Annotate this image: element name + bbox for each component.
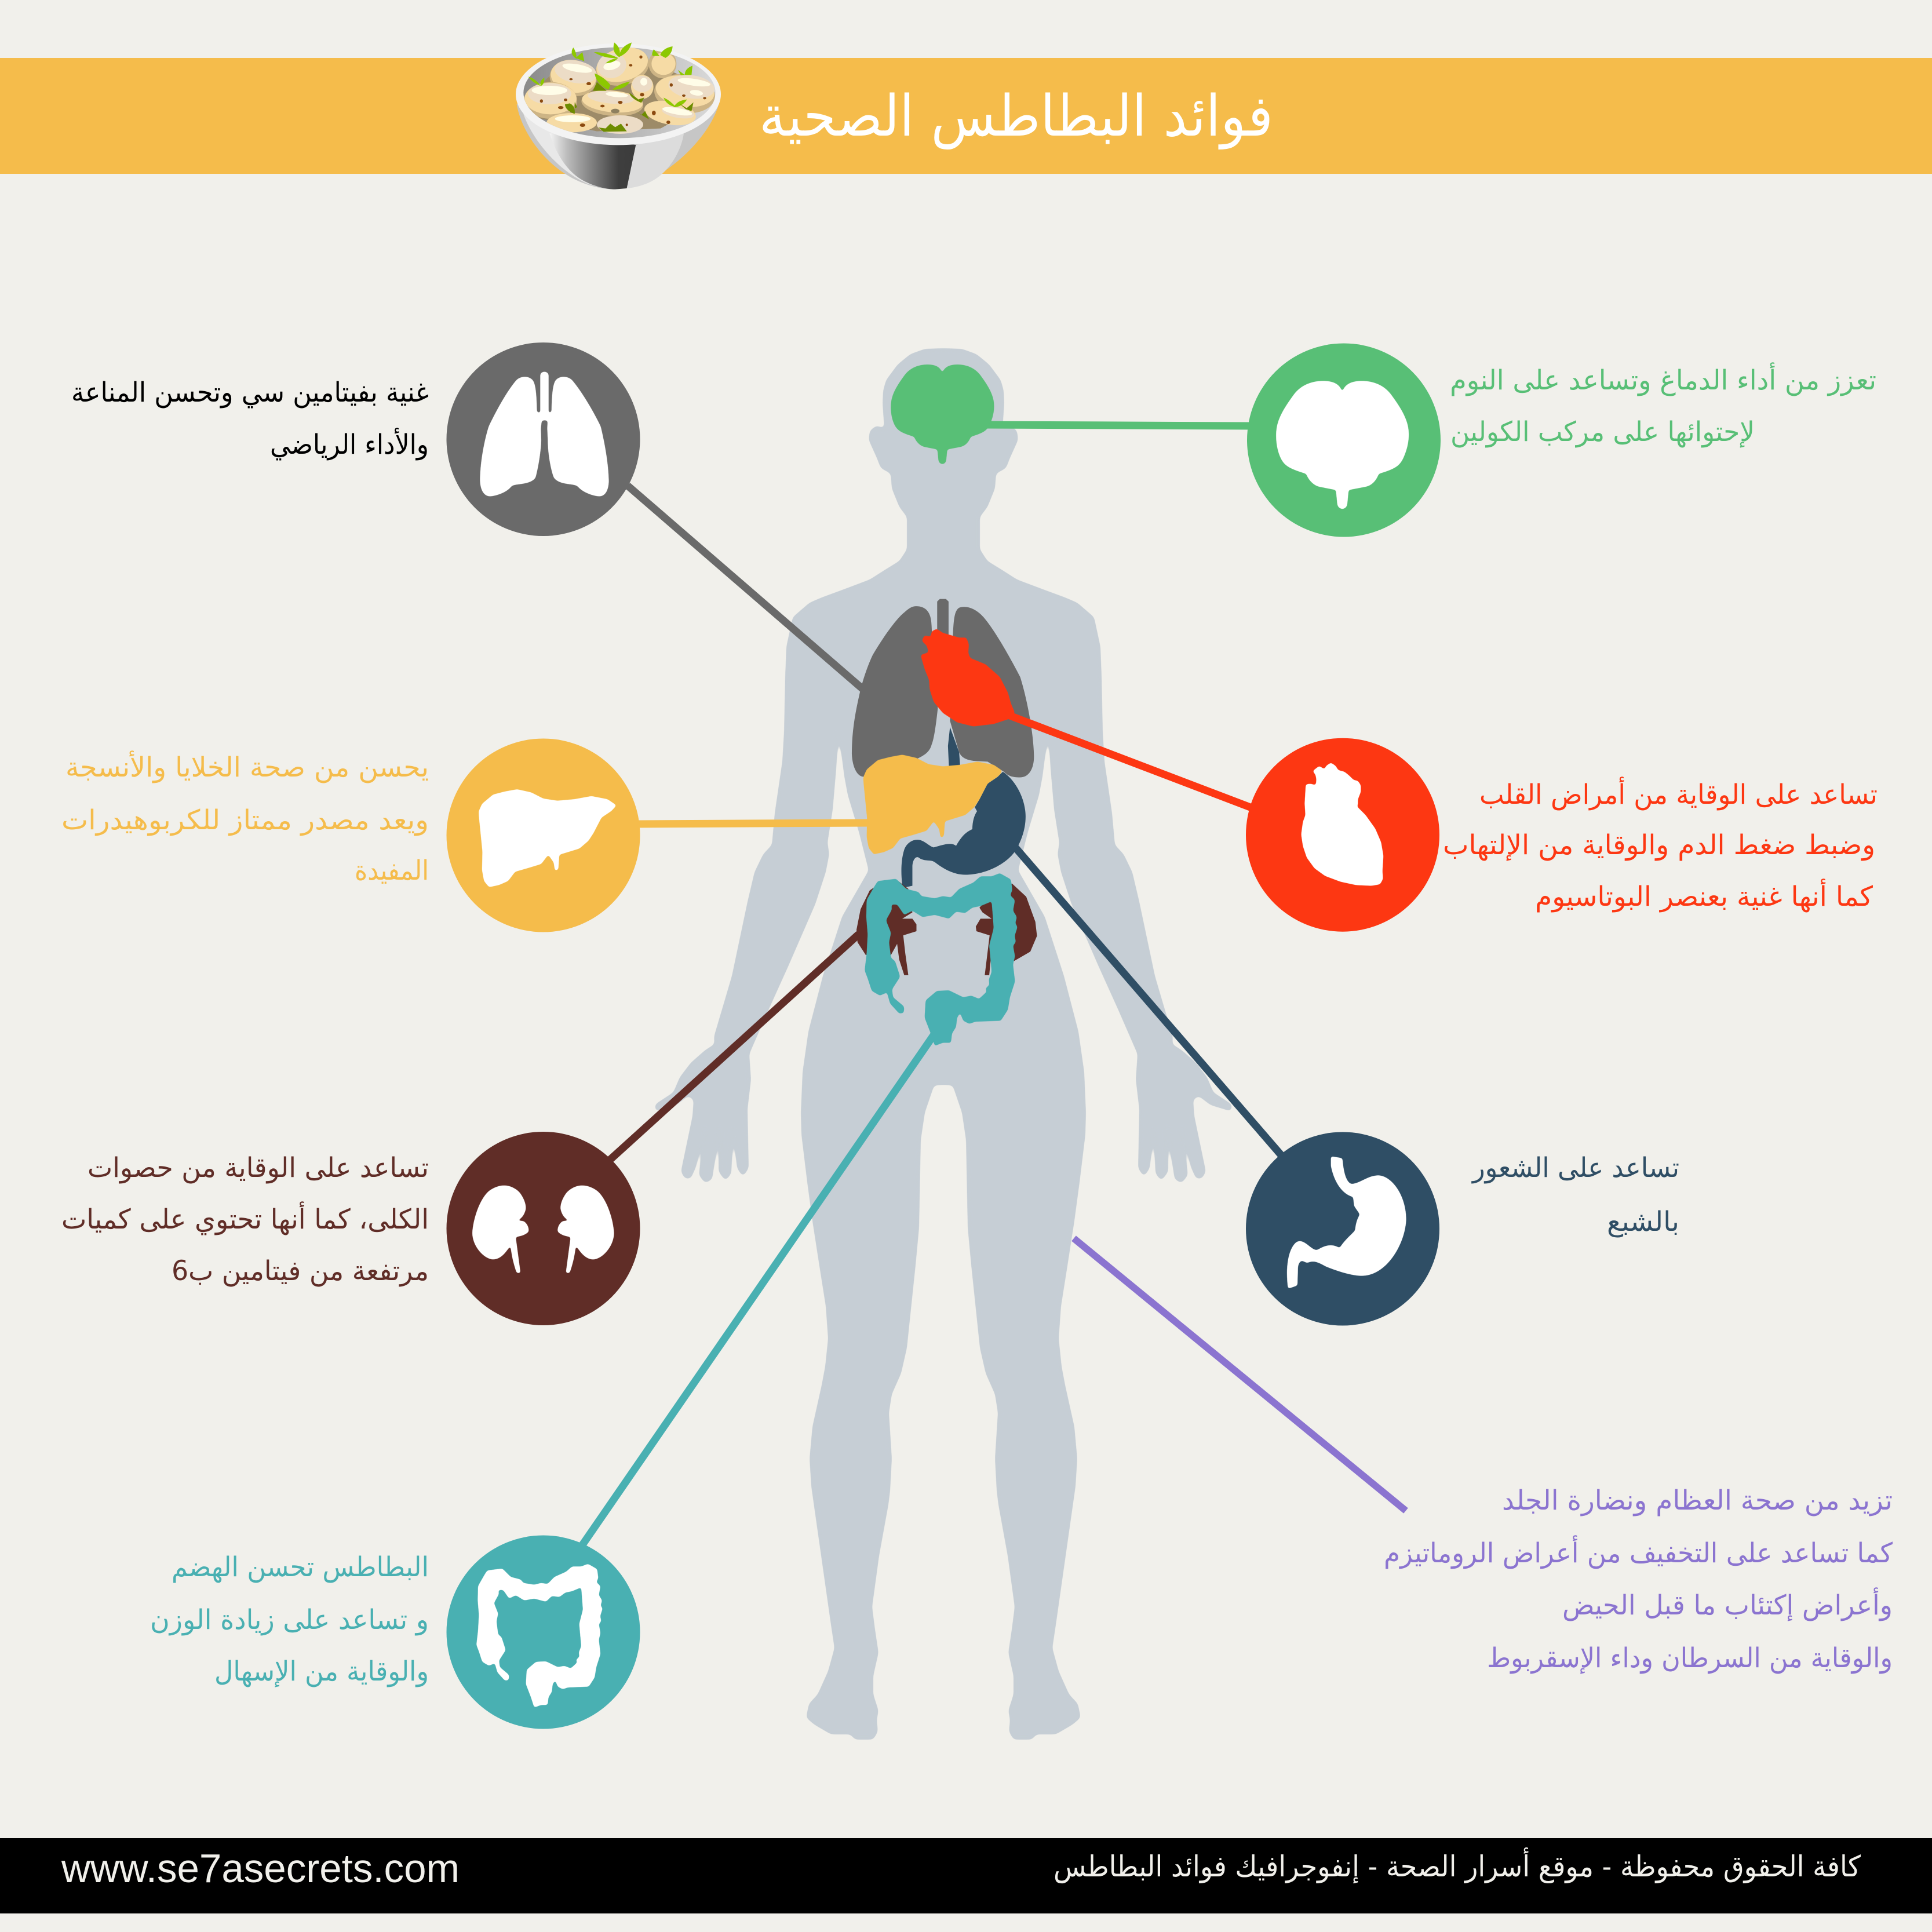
footer bar [0,1838,1932,1913]
footer copyright: كافة الحقوق محفوظة - موقع أسرار الصحة - إنفوجرافيك فوائد البطاطس [1054,1847,1861,1884]
icon: stomach [1287,1156,1406,1289]
text: lungs benefit: غنية بفيتامين سي وتحسن المناعة [71,377,429,409]
footer website: www.se7asecrets.com [61,1846,460,1891]
text: lungs benefit [71,377,429,461]
panel: colon [150,1536,640,1729]
text: skin and bones benefit: كما تساعد على التخفيف من أعراض الروماتيزم [1384,1535,1893,1569]
text: liver benefit: ويعد مصدر ممتاز للكربوهيدرات [61,804,429,836]
circle: kidneys [446,1132,640,1325]
panel: brain [1247,343,1876,537]
panel: heart [1246,738,1878,932]
organ: esophagus [948,727,960,768]
header banner [0,58,1932,174]
panel: kidneys [61,1132,640,1325]
circle: lungs [446,342,640,536]
text: brain benefit: تعزز من أداء الدماغ وتساعد على النوم [1450,362,1876,396]
icon: bowl of potatoes [516,42,721,189]
connector: colon teal [582,1034,934,1545]
connector: liver yellow [637,823,872,824]
text: colon benefit [150,1551,429,1687]
organ: liver [863,754,1003,854]
organs in torso [852,599,1037,1046]
panel: liver [61,738,640,932]
text: skin and bones benefit: وأعراض إكتئاب ما قبل الحيض [1562,1587,1893,1621]
text: kidneys benefit [61,1152,429,1287]
organ: lungs [852,599,1034,777]
text: kidneys benefit: مرتفعة من فيتامين ب6 [172,1255,429,1287]
panel: lungs [71,342,640,536]
text: colon benefit: البطاطس تحسن الهضم [172,1551,429,1583]
text: lungs benefit: والأداء الرياضي [270,427,429,461]
organ: stomach [901,772,1026,888]
text: stomach benefit [1471,1152,1679,1238]
title: فوائد البطاطس الصحية [759,83,1273,150]
organ: brain [891,364,994,464]
connector: skin purple [1074,1238,1406,1511]
text: kidneys benefit: الكلى، كما أنها تحتوي على كميات [61,1201,429,1235]
text: heart benefit: تساعد على الوقاية من أمراض القلب [1479,777,1878,811]
organ: heart [921,629,1015,727]
text: liver benefit [61,750,429,887]
text: brain benefit: لإحتوائها على مركب الكولين [1450,416,1755,448]
text: skin and bones benefit [1384,1485,1893,1674]
text: colon benefit: والوقاية من الإسهال [214,1656,429,1687]
circle: stomach [1246,1132,1439,1326]
text: heart benefit [1443,777,1878,913]
text: liver benefit: يحسن من صحة الخلايا والأنسجة [65,750,429,783]
organ: kidneys [856,880,1037,975]
organ: colon [865,873,1018,1046]
text: kidneys benefit: تساعد على الوقاية من حصوات [88,1152,429,1184]
text: heart benefit: كما أنها غنية بعنصر البوتاسيوم [1535,878,1873,913]
circle: brain [1247,343,1441,537]
text: brain benefit [1450,362,1876,448]
icon: heart [1301,763,1383,886]
text: skin and bones benefit: تزيد من صحة العظام ونضارة الجلد [1502,1485,1893,1517]
text: stomach benefit: تساعد على الشعور [1471,1152,1679,1184]
text: liver benefit: المفيدة [355,855,429,887]
connector: kidneys brown [610,934,859,1160]
icon: brain [1276,381,1409,509]
circle: colon [446,1536,640,1729]
icon: liver [479,789,617,887]
icon: kidneys [472,1186,614,1273]
connector: stomach navy [1014,846,1283,1157]
panel: stomach [1246,1132,1679,1326]
circle: liver [446,738,640,932]
icon: colon [476,1564,603,1708]
human body silhouette [655,348,1232,1740]
icon: lungs [480,371,609,497]
text: stomach benefit: بالشبع [1607,1206,1679,1238]
text: colon benefit: و تساعد على زيادة الوزن [150,1604,429,1636]
text: heart benefit: وضبط ضغط الدم والوقاية من الإلتهاب [1443,829,1875,861]
connector: heart red [1005,714,1252,808]
circle: heart [1246,738,1439,932]
connector: brain green [985,425,1252,426]
text: skin and bones benefit: والوقاية من السرطان وداء الإسقربوط [1487,1642,1893,1674]
connector: lungs grey [628,486,863,690]
